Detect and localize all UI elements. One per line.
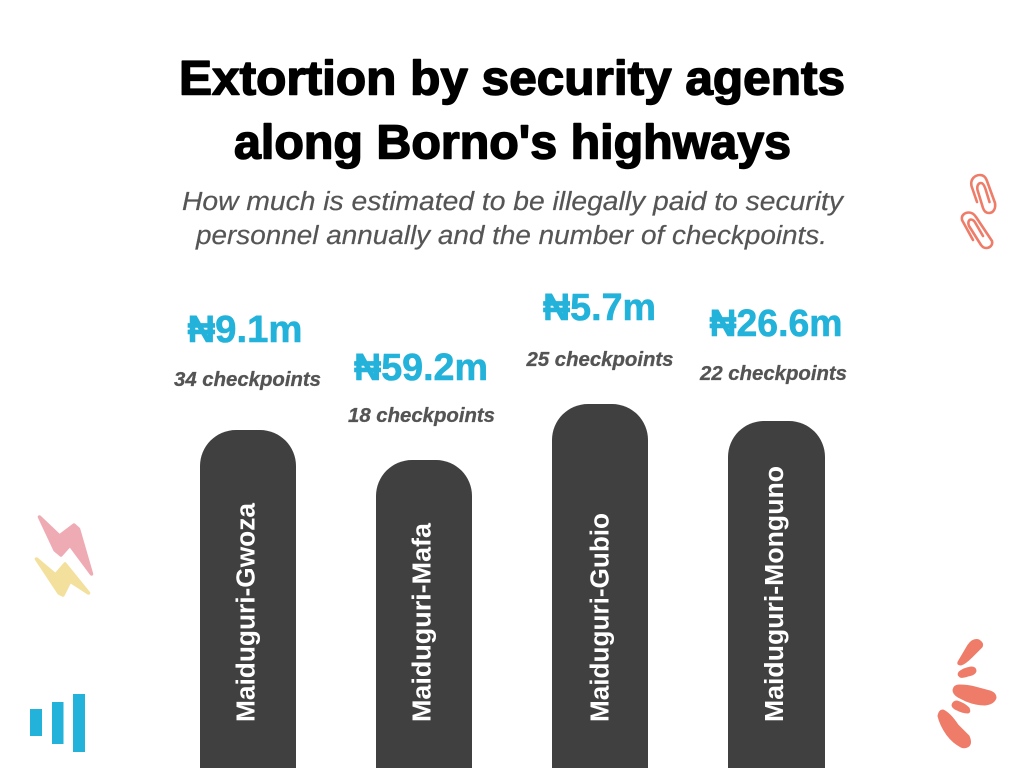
subtitle: How much is estimated to be illegally paid to security: [182, 188, 845, 216]
bar: Monguno: [728, 421, 825, 768]
icon: lightning bolts: [36, 517, 92, 595]
title: Extortion by security agents: [179, 52, 845, 106]
value: Gwoza amount: ₦9.1m: [188, 309, 302, 351]
checkpoints: Mafa: 18 checkpoints: [348, 405, 495, 427]
bar label: Gwoza: Maiduguri-Gwoza: [232, 502, 260, 722]
checkpoints: Gwoza: 34 checkpoints: [174, 369, 321, 391]
icon: burst strokes: [938, 640, 996, 748]
bolt: pink: [40, 517, 92, 574]
value: Gubio amount: ₦5.7m: [543, 287, 656, 329]
icon: paper clips: [962, 175, 995, 248]
column: Maiduguri-Gwoza: [174, 309, 321, 768]
column: Maiduguri-Gubio: [525, 287, 674, 768]
column: Maiduguri-Mafa: [348, 347, 495, 768]
bar: Mafa: [376, 460, 472, 768]
subtitle: personnel annually and the number of checkpoints.: [195, 222, 827, 250]
value: Mafa amount: ₦59.2m: [354, 347, 488, 389]
bar: Gwoza: [200, 430, 296, 768]
checkpoints: Monguno: 22 checkpoints: [699, 363, 847, 385]
subtitle: [182, 188, 845, 250]
column: Maiduguri-Monguno: [699, 303, 847, 768]
bar label: Gubio: Maiduguri-Gubio: [586, 513, 614, 722]
checkpoints: Gubio: 25 checkpoints: [525, 349, 674, 371]
title: [179, 52, 845, 170]
bar label: Mafa: Maiduguri-Mafa: [408, 522, 436, 722]
bar label: Monguno: Maiduguri-Monguno: [761, 466, 789, 722]
icon: bar signal: [30, 694, 85, 752]
title: along Borno's highways: [234, 116, 791, 170]
bar: Gubio: [552, 404, 648, 768]
value: Monguno amount: ₦26.6m: [710, 303, 842, 345]
bolt: yellow: [36, 559, 88, 595]
